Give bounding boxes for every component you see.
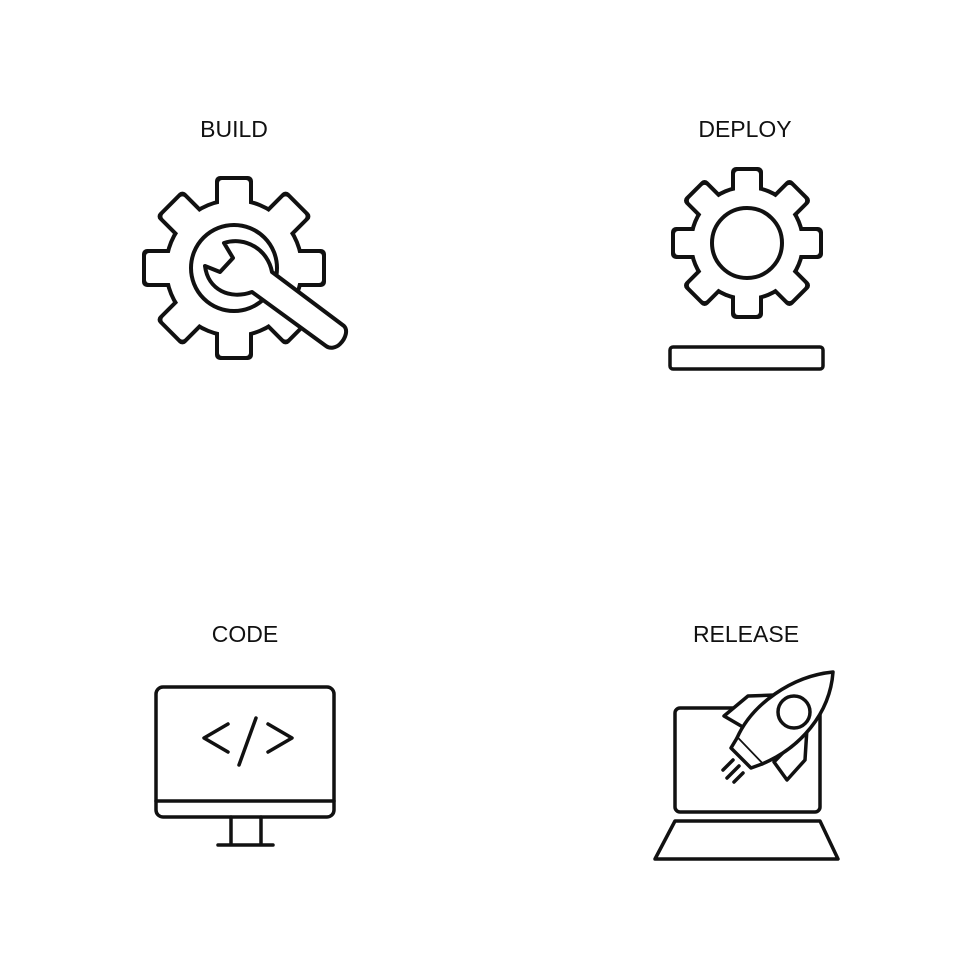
heading: BUILD: BUILD — [200, 116, 268, 142]
panel: release — [655, 621, 838, 859]
heading: RELEASE: RELEASE — [693, 621, 799, 647]
icon: gear with bar — [670, 167, 823, 369]
heading: CODE: CODE — [212, 621, 278, 647]
icon: gear with wrench — [142, 176, 346, 360]
panel: code — [156, 621, 334, 845]
panel: build — [142, 116, 346, 360]
icon: laptop with rocket — [655, 672, 838, 859]
panel: deploy — [670, 116, 823, 369]
icon: monitor with code — [156, 687, 334, 845]
heading: DEPLOY: DEPLOY — [698, 116, 792, 142]
